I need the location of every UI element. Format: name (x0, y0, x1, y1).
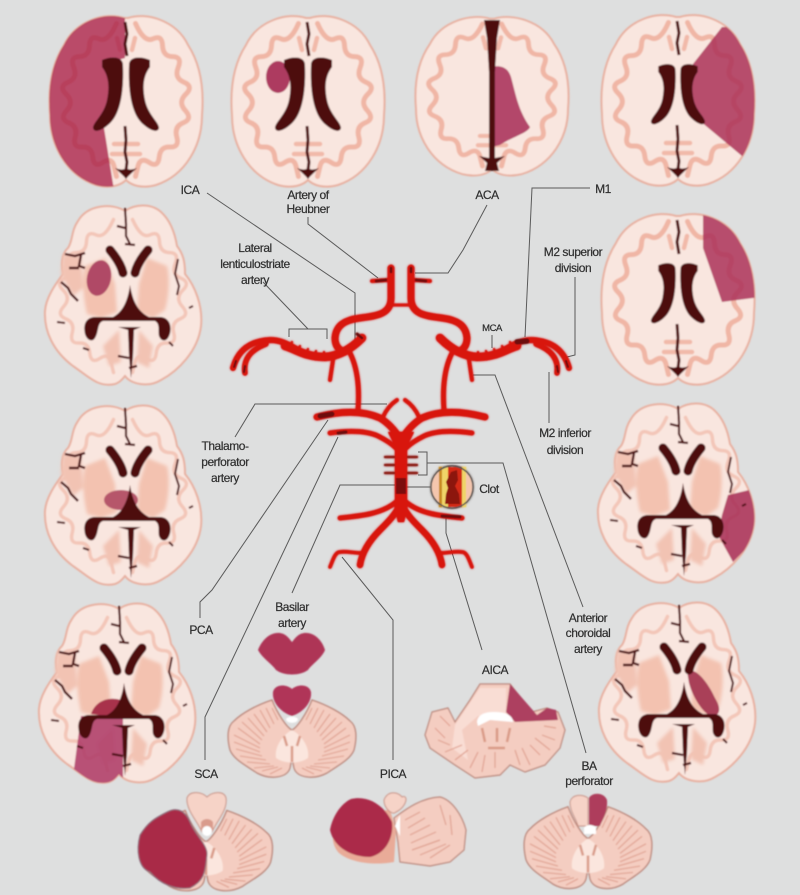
brainstem: PICA infarct (330, 793, 466, 866)
label: AICA: AICA (482, 663, 509, 677)
label: PICA: PICA (380, 767, 407, 781)
basilar bifurcation (388, 432, 414, 522)
label: SCA: SCA (194, 767, 218, 781)
label: Clot: Clot (479, 482, 500, 496)
label: ICA: ICA (181, 183, 200, 197)
label: Basilar artery: artery (278, 616, 306, 630)
brain: lateral lenticulostriate territory (45, 206, 201, 385)
leader lines (200, 188, 590, 760)
label: M2 superior division: M2 superior (544, 245, 603, 259)
right hemisphere arteries (401, 268, 569, 567)
label: BA perforator: perforator (565, 774, 613, 788)
pontine perforators (385, 457, 417, 473)
label: ACA: ACA (475, 188, 499, 202)
anterior communicating artery (392, 304, 410, 306)
brain: ICA territory (36, 10, 203, 190)
left hemisphere arteries (233, 268, 401, 567)
label: MCA: MCA (482, 323, 503, 334)
brain: PCA territory (39, 604, 195, 784)
brain: artery of Heubner territory (231, 16, 385, 187)
arteries: circle of Willis (233, 268, 569, 567)
label: Lateral lenticulostriate artery: Lateral (238, 241, 272, 255)
label: M2 inferior division: division (547, 443, 583, 457)
label: Thalamo-perforator artery: Thalamo- (201, 439, 249, 453)
brain: M1 territory (601, 15, 768, 186)
label: Thalamo-perforator artery: perforator (201, 455, 249, 469)
label: Basilar artery: Basilar (275, 600, 309, 614)
label: M1: M1 (595, 182, 612, 196)
labels (181, 182, 613, 788)
label: Anterior choroidal artery: artery (574, 642, 602, 656)
brain: anterior choroidal territory (599, 602, 755, 782)
label: Lateral lenticulostriate artery: lenticulostriate (220, 257, 291, 271)
label: Lateral lenticulostriate artery: artery (241, 273, 269, 287)
basilar artery (395, 440, 407, 508)
label: PCA: PCA (189, 623, 213, 637)
brain: thalamoperforator territory (45, 406, 201, 585)
label: Anterior choroidal artery: choroidal (566, 626, 610, 640)
label: BA perforator: BA (581, 759, 597, 773)
label: Artery of Heubner: Heubner (287, 202, 330, 216)
icon: clot in magnified vessel (431, 466, 473, 508)
brain: M2 inferior division territory (598, 404, 766, 583)
label: Thalamo-perforator artery: artery (211, 471, 239, 485)
label: M2 superior division: division (555, 261, 591, 275)
brain: ACA territory (415, 17, 569, 176)
brainstem: SCA infarct (138, 793, 272, 891)
label: Artery of Heubner: Artery of (287, 188, 330, 202)
label: Anterior choroidal artery: Anterior (569, 611, 608, 625)
brainstem: AICA infarct (425, 684, 565, 778)
brainstem: basilar artery infarct (228, 633, 356, 777)
brainstem: BA perforator infarct (524, 794, 652, 888)
brain: M2 superior division territory (601, 208, 768, 385)
clot segment (396, 478, 406, 494)
label: M2 inferior division: M2 inferior (539, 426, 591, 440)
